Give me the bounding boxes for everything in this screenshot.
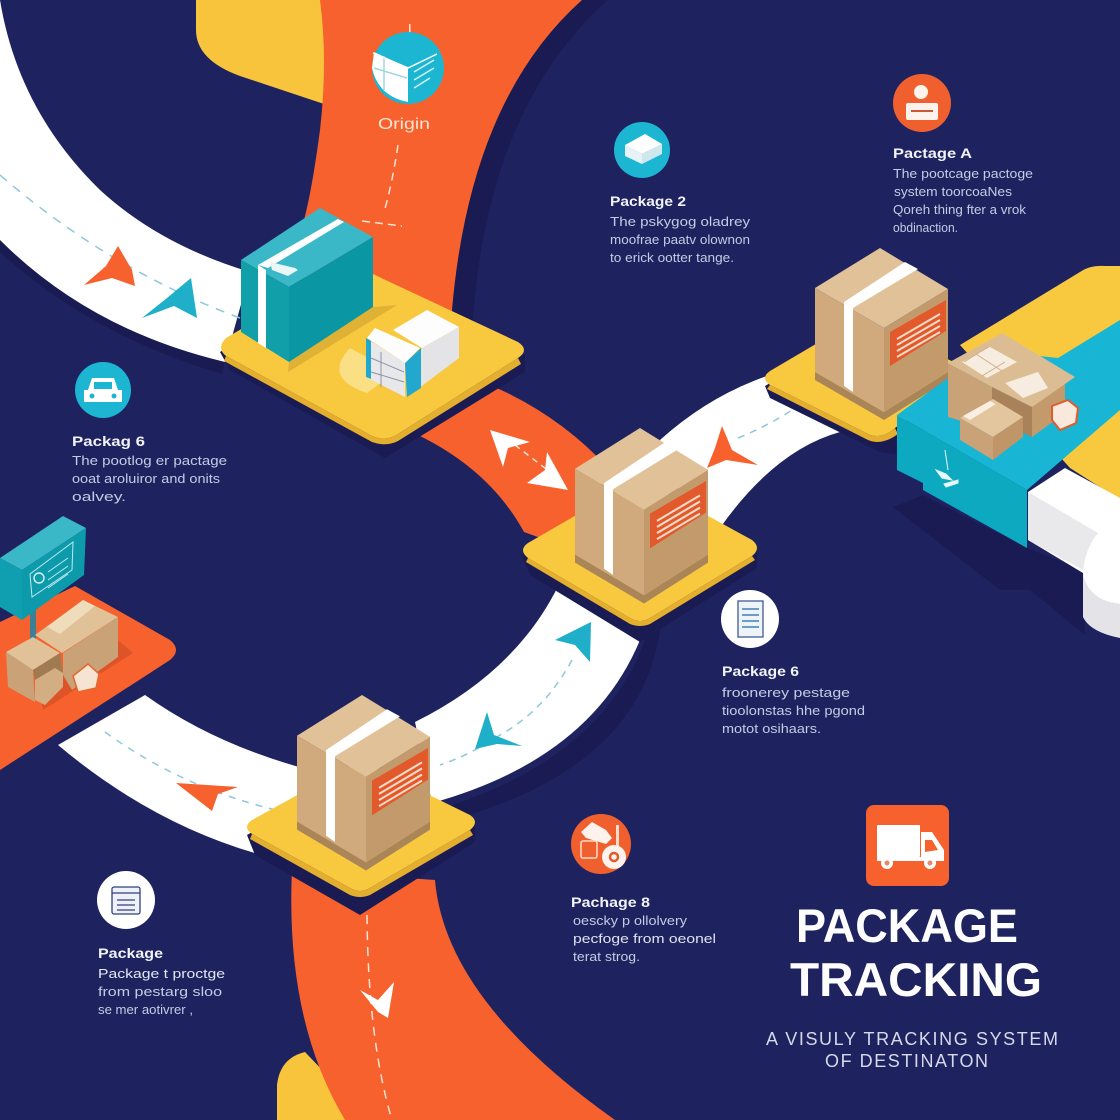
text: package 6 left: Packag 6 — [72, 433, 145, 449]
title: PACKAGE — [796, 899, 1018, 952]
pole — [30, 610, 36, 640]
label: origin: Origin — [378, 116, 430, 133]
box: centre tan — [575, 428, 708, 603]
teal top — [897, 320, 1120, 490]
text: package 8: pecfoge from oeonel — [573, 932, 716, 946]
white road: centre to right platform — [660, 375, 840, 528]
white road: top-left — [0, 0, 250, 374]
text: package A — [893, 145, 1033, 235]
text: package bottom left: from pestarg sloo — [98, 985, 222, 999]
text: package 6 right: froonerey pestage — [722, 686, 850, 700]
icon: orange arrow — [707, 426, 758, 468]
text: package 8 — [571, 894, 716, 964]
icon: white arrows on centre road — [490, 430, 568, 490]
title: TRACKING — [790, 953, 1042, 1006]
subtitle: A VISULY TRACKING SYSTEM — [766, 1029, 1058, 1049]
platform: bottom — [247, 763, 475, 915]
platform: right conveyor with parcels — [893, 266, 1120, 638]
text: package 8: Pachage 8 — [571, 894, 650, 910]
text: package 2: Package 2 — [610, 193, 686, 209]
text: package A: system toorcoaNes — [894, 185, 1012, 199]
small white box — [366, 310, 459, 397]
icon: teal arrows on lower road — [475, 622, 591, 749]
box: bottom tan — [297, 695, 430, 870]
yellow band — [960, 266, 1120, 500]
icon: package A — [893, 74, 951, 132]
text: package 6 left — [72, 433, 227, 504]
orange road: centre — [418, 385, 610, 545]
platform: right — [765, 318, 990, 455]
white road: lower left — [58, 695, 310, 862]
white block — [1028, 468, 1120, 604]
text: package bottom left — [98, 945, 225, 1017]
text: package A: Qoreh thing fter a vrok — [893, 203, 1027, 217]
subtitle: OF DESTINATON — [825, 1051, 988, 1071]
icon: orange arrow upper road — [84, 246, 135, 286]
tiny red parcel — [1052, 400, 1078, 430]
text: package A: Pactage A — [893, 145, 972, 161]
platform: centre — [522, 481, 757, 642]
icon: package bottom left — [97, 871, 155, 929]
text: package 6 left: The pootlog er pactage — [72, 454, 227, 468]
platform: top with teal and white boxes — [220, 208, 525, 458]
text: package 8: oescky p ollolvery — [573, 914, 688, 928]
teal sign — [0, 516, 86, 620]
text: package 2 — [610, 193, 751, 265]
text: package 8: terat strog. — [573, 950, 640, 964]
icon: package 6 left — [75, 362, 131, 418]
orange road: from origin — [304, 0, 608, 340]
text: package bottom left: Package t proctge — [98, 967, 225, 981]
text: package 6 right: tioolonstas hhe pgond — [722, 704, 865, 718]
icon: truck tile — [866, 805, 949, 886]
box: right tan — [815, 248, 948, 420]
text: package A: obdinaction. — [893, 221, 958, 235]
teal box — [241, 208, 373, 362]
icon: teal arrow upper road — [142, 278, 197, 318]
icon: origin — [372, 24, 444, 104]
light swoosh — [339, 348, 395, 393]
platform: left with sign and parcels — [0, 516, 176, 770]
title — [790, 899, 1042, 1006]
text: package bottom left: Package — [98, 945, 163, 961]
orange road: bottom — [291, 870, 615, 1120]
text: package 6 left: oalvey. — [72, 490, 126, 504]
text: package 6 right: motot osihaars. — [722, 722, 821, 736]
yellow top block — [196, 0, 330, 106]
text: package 6 left: ooat aroluiror and onits — [72, 472, 220, 486]
text: package A: The pootcage pactoge — [893, 167, 1033, 181]
yellow bottom block — [277, 1052, 370, 1120]
icon: orange arrow on lower road — [176, 783, 238, 811]
icon: package 6 right — [721, 590, 779, 648]
text: package 6 right: Package 6 — [722, 663, 799, 679]
text: package 2: The pskygog oladrey — [610, 215, 751, 229]
white road: centre to bottom platform — [415, 578, 660, 822]
icon: white arrow on bottom road — [360, 982, 394, 1018]
subtitle — [766, 1029, 1058, 1071]
text: package 6 right — [722, 663, 865, 736]
icon: package 2 — [614, 122, 670, 178]
small white arrow mark — [936, 450, 958, 487]
text: package bottom left: se mer aotivrer , — [98, 1003, 193, 1017]
text: package 2: moofrae paatv olownon — [610, 233, 750, 247]
teal front — [897, 415, 1027, 548]
text: package 2: to erick ootter tange. — [610, 251, 734, 265]
stacked parcels — [948, 333, 1078, 460]
icon: package 8 — [571, 814, 631, 874]
parcels — [6, 600, 118, 705]
